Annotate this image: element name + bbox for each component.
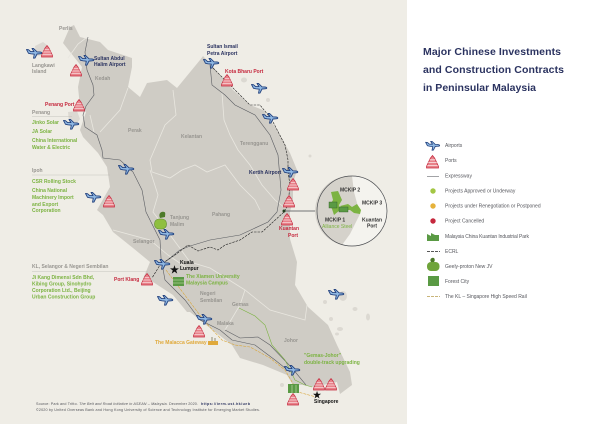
inset: MCKIP circle: MCKIP 2 — [340, 188, 360, 194]
legend: Geely — [427, 258, 493, 271]
Gemas-Johor double-track upgrading line — [239, 308, 312, 387]
inset: MCKIP circle: Port — [367, 224, 377, 230]
land: Peninsular Malaysia — [63, 25, 352, 394]
state labels: Tanjung — [170, 215, 189, 221]
text block: Ipoh projects: Machinery Import — [32, 195, 74, 201]
star: Kuala Lumpur: ★ — [170, 265, 179, 276]
inset: MCKIP circle: MCKIP 3 — [362, 200, 382, 206]
text block: KL, Selangor and Negeri Sembilan projects: Urban Construction Group — [32, 294, 95, 300]
legend: ports — [427, 156, 457, 168]
title: and Construction Contracts — [423, 64, 564, 76]
text block: KL, Selangor and Negeri Sembilan projects: Kibing Group, Sinohydro — [32, 282, 91, 288]
state labels: Negeri — [200, 291, 216, 297]
map background — [0, 0, 407, 424]
legend: airports: Airports — [445, 143, 463, 149]
state labels: Terengganu — [240, 141, 268, 147]
text block: Ipoh projects: Ipoh — [32, 168, 43, 174]
legend: expressway — [427, 174, 472, 180]
state borders — [68, 38, 307, 330]
state labels: Kelantan — [181, 134, 202, 140]
airport and port labels: Lumpur — [180, 266, 199, 272]
icon: Xiamen University campus — [173, 277, 184, 286]
airport and port labels: Halim Airport — [94, 62, 126, 68]
source note — [36, 402, 260, 412]
legend: Geely: Geely-proton New JV — [445, 264, 493, 270]
text block: Ipoh projects: CSR Rolling Stock — [32, 179, 76, 185]
text block: Penang projects: Water & Electric — [32, 145, 70, 151]
state labels: Langkawi — [32, 63, 55, 69]
source note: https://ierm.ust.hk/ueb — [201, 402, 251, 406]
legend: cancelled: Project Cancelled — [445, 218, 484, 224]
icons: ports — [42, 46, 336, 405]
text block: Penang projects: Jinko Solar — [32, 120, 59, 126]
legend: airports — [426, 141, 463, 150]
airport and port labels: Kertih Airport — [249, 170, 282, 176]
title: in Peninsular Malaysia — [423, 82, 536, 94]
title: Major Chinese Investments — [423, 46, 561, 58]
source note: ©2020 by United Overseas Bank and Hong Kong University of Science and Technology Institute for Emerging Market Studies. — [36, 408, 260, 412]
inset: MCKIP circle: Alliance Steel — [322, 224, 352, 230]
legend: approved: Projects Approved or Underway — [445, 188, 516, 194]
state labels — [32, 26, 298, 344]
project labels: Malaysia Campus — [186, 280, 228, 286]
islands — [35, 42, 370, 387]
state labels: Pahang — [212, 212, 230, 218]
state labels: Sembilan — [200, 298, 222, 304]
star: Singapore: ★ — [313, 390, 322, 400]
expressway — [83, 37, 306, 385]
airport and port labels: Kuala — [180, 260, 194, 266]
source note: Source: Park and Tritto. The Belt and Road Initiative in ASEAN – Malaysia. December 2020. — [36, 402, 198, 406]
airport and port labels — [45, 44, 339, 405]
project labels: The Malacca Gateway — [155, 340, 207, 346]
text block: KL, Selangor and Negeri Sembilan projects: Corporation Ltd., Beijing — [32, 288, 91, 294]
text block: Ipoh projects: China National — [32, 188, 68, 194]
text block: KL, Selangor and Negeri Sembilan projects: KL, Selangor & Negeri Sembilan — [32, 264, 108, 270]
icons: airports — [26, 48, 344, 375]
legend: MCKIP: Malaysia China Kuantan Industrial Park — [445, 234, 530, 240]
project labels: The Xiamen University — [186, 274, 240, 280]
text block: KL, Selangor and Negeri Sembilan projects — [32, 264, 148, 300]
airport and port labels: Sultan Ismail — [207, 44, 238, 50]
airport and port labels: Kuantan — [279, 226, 299, 232]
legend: expressway: Expressway — [445, 174, 472, 180]
icon: Forest City — [288, 384, 299, 393]
inset: MCKIP circle — [315, 176, 387, 246]
text block: Ipoh projects: Corporation — [32, 208, 61, 214]
legend — [426, 141, 541, 300]
panel: peninsula map — [26, 25, 387, 405]
inset: MCKIP circle: Kuantan — [362, 218, 382, 224]
airport and port labels: Sultan Abdul — [94, 56, 125, 62]
state labels: Perak — [128, 128, 142, 134]
text block: Ipoh projects — [32, 168, 110, 214]
inset: MCKIP circle: MCKIP 1 — [325, 218, 345, 224]
icon: Geely-Proton car — [154, 212, 166, 229]
title — [423, 46, 564, 94]
text block: KL, Selangor and Negeri Sembilan projects: Ji Kang Dimensi Sdn Bhd, — [32, 275, 95, 281]
icon: Malacca Gateway — [208, 337, 218, 345]
connector to inset — [282, 210, 318, 212]
state labels: Selangor — [133, 239, 154, 245]
legend: ECRL — [427, 249, 459, 255]
state labels: Kedah — [95, 76, 110, 82]
ECRL — [152, 68, 290, 278]
state labels: Malim — [170, 222, 185, 228]
text block: Penang projects: JA Solar — [32, 129, 52, 135]
project labels: double-track upgrading — [304, 360, 360, 366]
airport and port labels: Port — [288, 233, 298, 239]
text block: Penang projects: Penang — [32, 110, 50, 116]
legend: Forest City — [428, 276, 470, 286]
state labels: Johor — [284, 338, 298, 344]
legend: ports: Ports — [445, 158, 457, 164]
The KL - Singapore High Speed Rail — [166, 270, 316, 397]
airport and port labels: Penang Port — [45, 102, 75, 108]
airport and port labels: Singapore — [314, 399, 339, 405]
airport and port labels: Kota Bharu Port — [225, 69, 264, 75]
state labels: Gemas — [232, 302, 249, 308]
airport and port labels: Port Klang — [114, 277, 139, 283]
airport and port labels: Petra Airport — [207, 51, 238, 57]
state labels: Malaka — [217, 321, 234, 327]
state labels: Perlis — [59, 26, 73, 32]
legend: Forest City: Forest City — [445, 279, 470, 285]
legend: MCKIP — [427, 233, 530, 241]
legend: high speed rail: The KL – Singapore High Speed Rail — [445, 294, 527, 300]
legend: ECRL: ECRL — [445, 249, 459, 255]
project labels — [155, 274, 360, 366]
legend: renegotiation: Projects under Renegotiation or Postponed — [445, 204, 541, 210]
state labels: Island — [32, 69, 46, 75]
text block: Penang projects: China International — [32, 138, 78, 144]
project labels: "Gemas-Johor" — [304, 353, 342, 359]
text block: Ipoh projects: and Export — [32, 202, 58, 208]
text block: Penang projects — [32, 110, 78, 151]
